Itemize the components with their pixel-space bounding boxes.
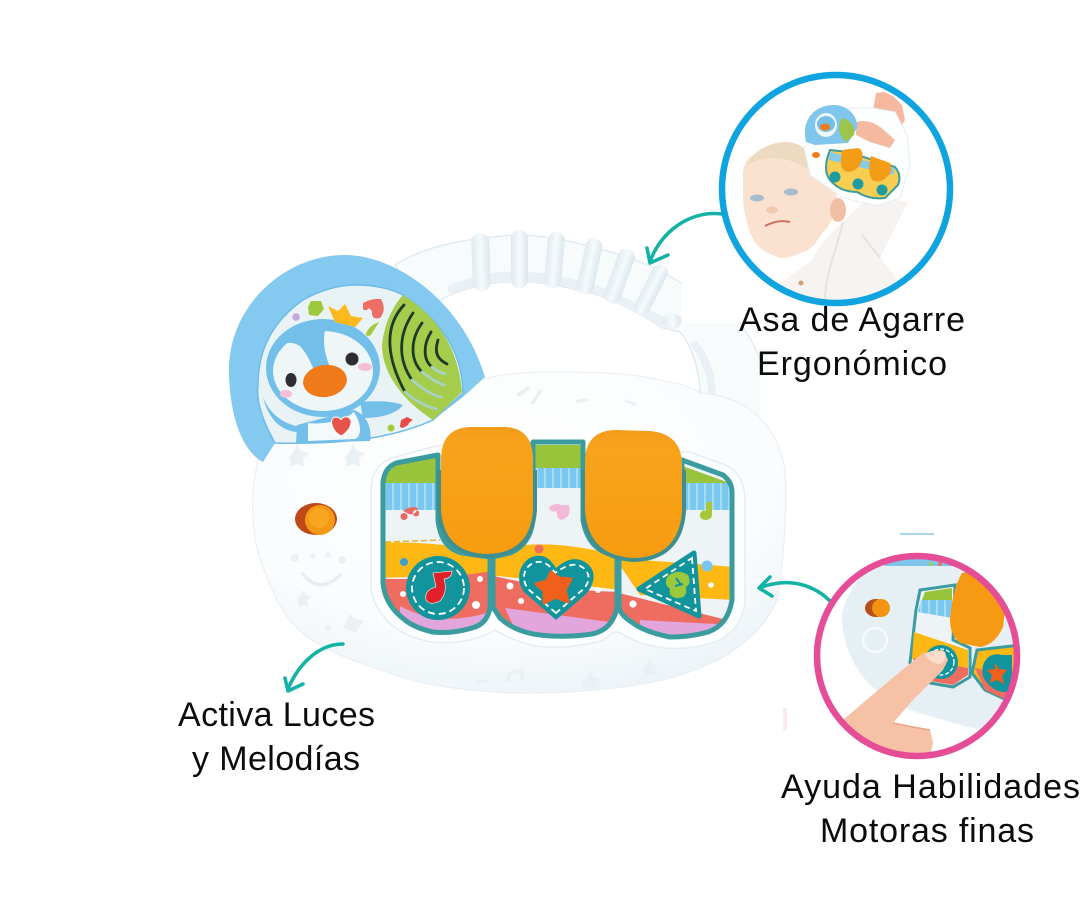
dome inner panel (258, 285, 463, 443)
piano key middle (490, 440, 620, 640)
main body (253, 372, 786, 693)
decorative stickers (292, 299, 413, 432)
key wells (441, 470, 682, 558)
photo: baby holding toy (722, 75, 950, 310)
label: motor skills: Motoras finas (820, 812, 1034, 850)
mini toy (804, 108, 910, 206)
penguin speaker dome (229, 255, 485, 462)
pink ring (817, 556, 1017, 756)
arrow: keys callout (759, 577, 832, 603)
hand (874, 92, 905, 124)
label: lights and melodies: Activa Luces (178, 696, 375, 734)
baby head (743, 142, 837, 258)
key panel recess (371, 446, 745, 648)
orange key two (585, 430, 682, 558)
mini orange key (950, 572, 1005, 647)
blue ring (722, 75, 950, 303)
photo: finger pressing key (817, 555, 1030, 770)
handle (394, 230, 760, 395)
image remnant marks (783, 533, 934, 730)
label: handle (739, 301, 965, 383)
mini key (910, 585, 970, 687)
arrow: body callout (285, 644, 343, 691)
embossed details (288, 386, 659, 689)
shirt (780, 200, 908, 300)
power button (295, 503, 337, 535)
arrow: handle callout (647, 214, 722, 263)
handle ribs (471, 230, 682, 330)
label: lights and melodies: y Melodías (192, 740, 360, 778)
hand (844, 650, 948, 753)
orange key one (441, 427, 533, 554)
penguin (263, 319, 403, 443)
label: motor skills: Ayuda Habilidades (781, 768, 1080, 806)
speaker grille (382, 295, 462, 420)
label: lights and melodies (178, 696, 375, 778)
piano key right (618, 458, 734, 640)
piano key left (380, 452, 492, 635)
label: handle: Asa de Agarre (739, 301, 965, 339)
mini keys (826, 150, 899, 198)
smile emboss (303, 574, 340, 585)
label: handle: Ergonómico (757, 345, 947, 383)
label: motor skills (781, 768, 1080, 850)
toy piano (229, 230, 786, 693)
